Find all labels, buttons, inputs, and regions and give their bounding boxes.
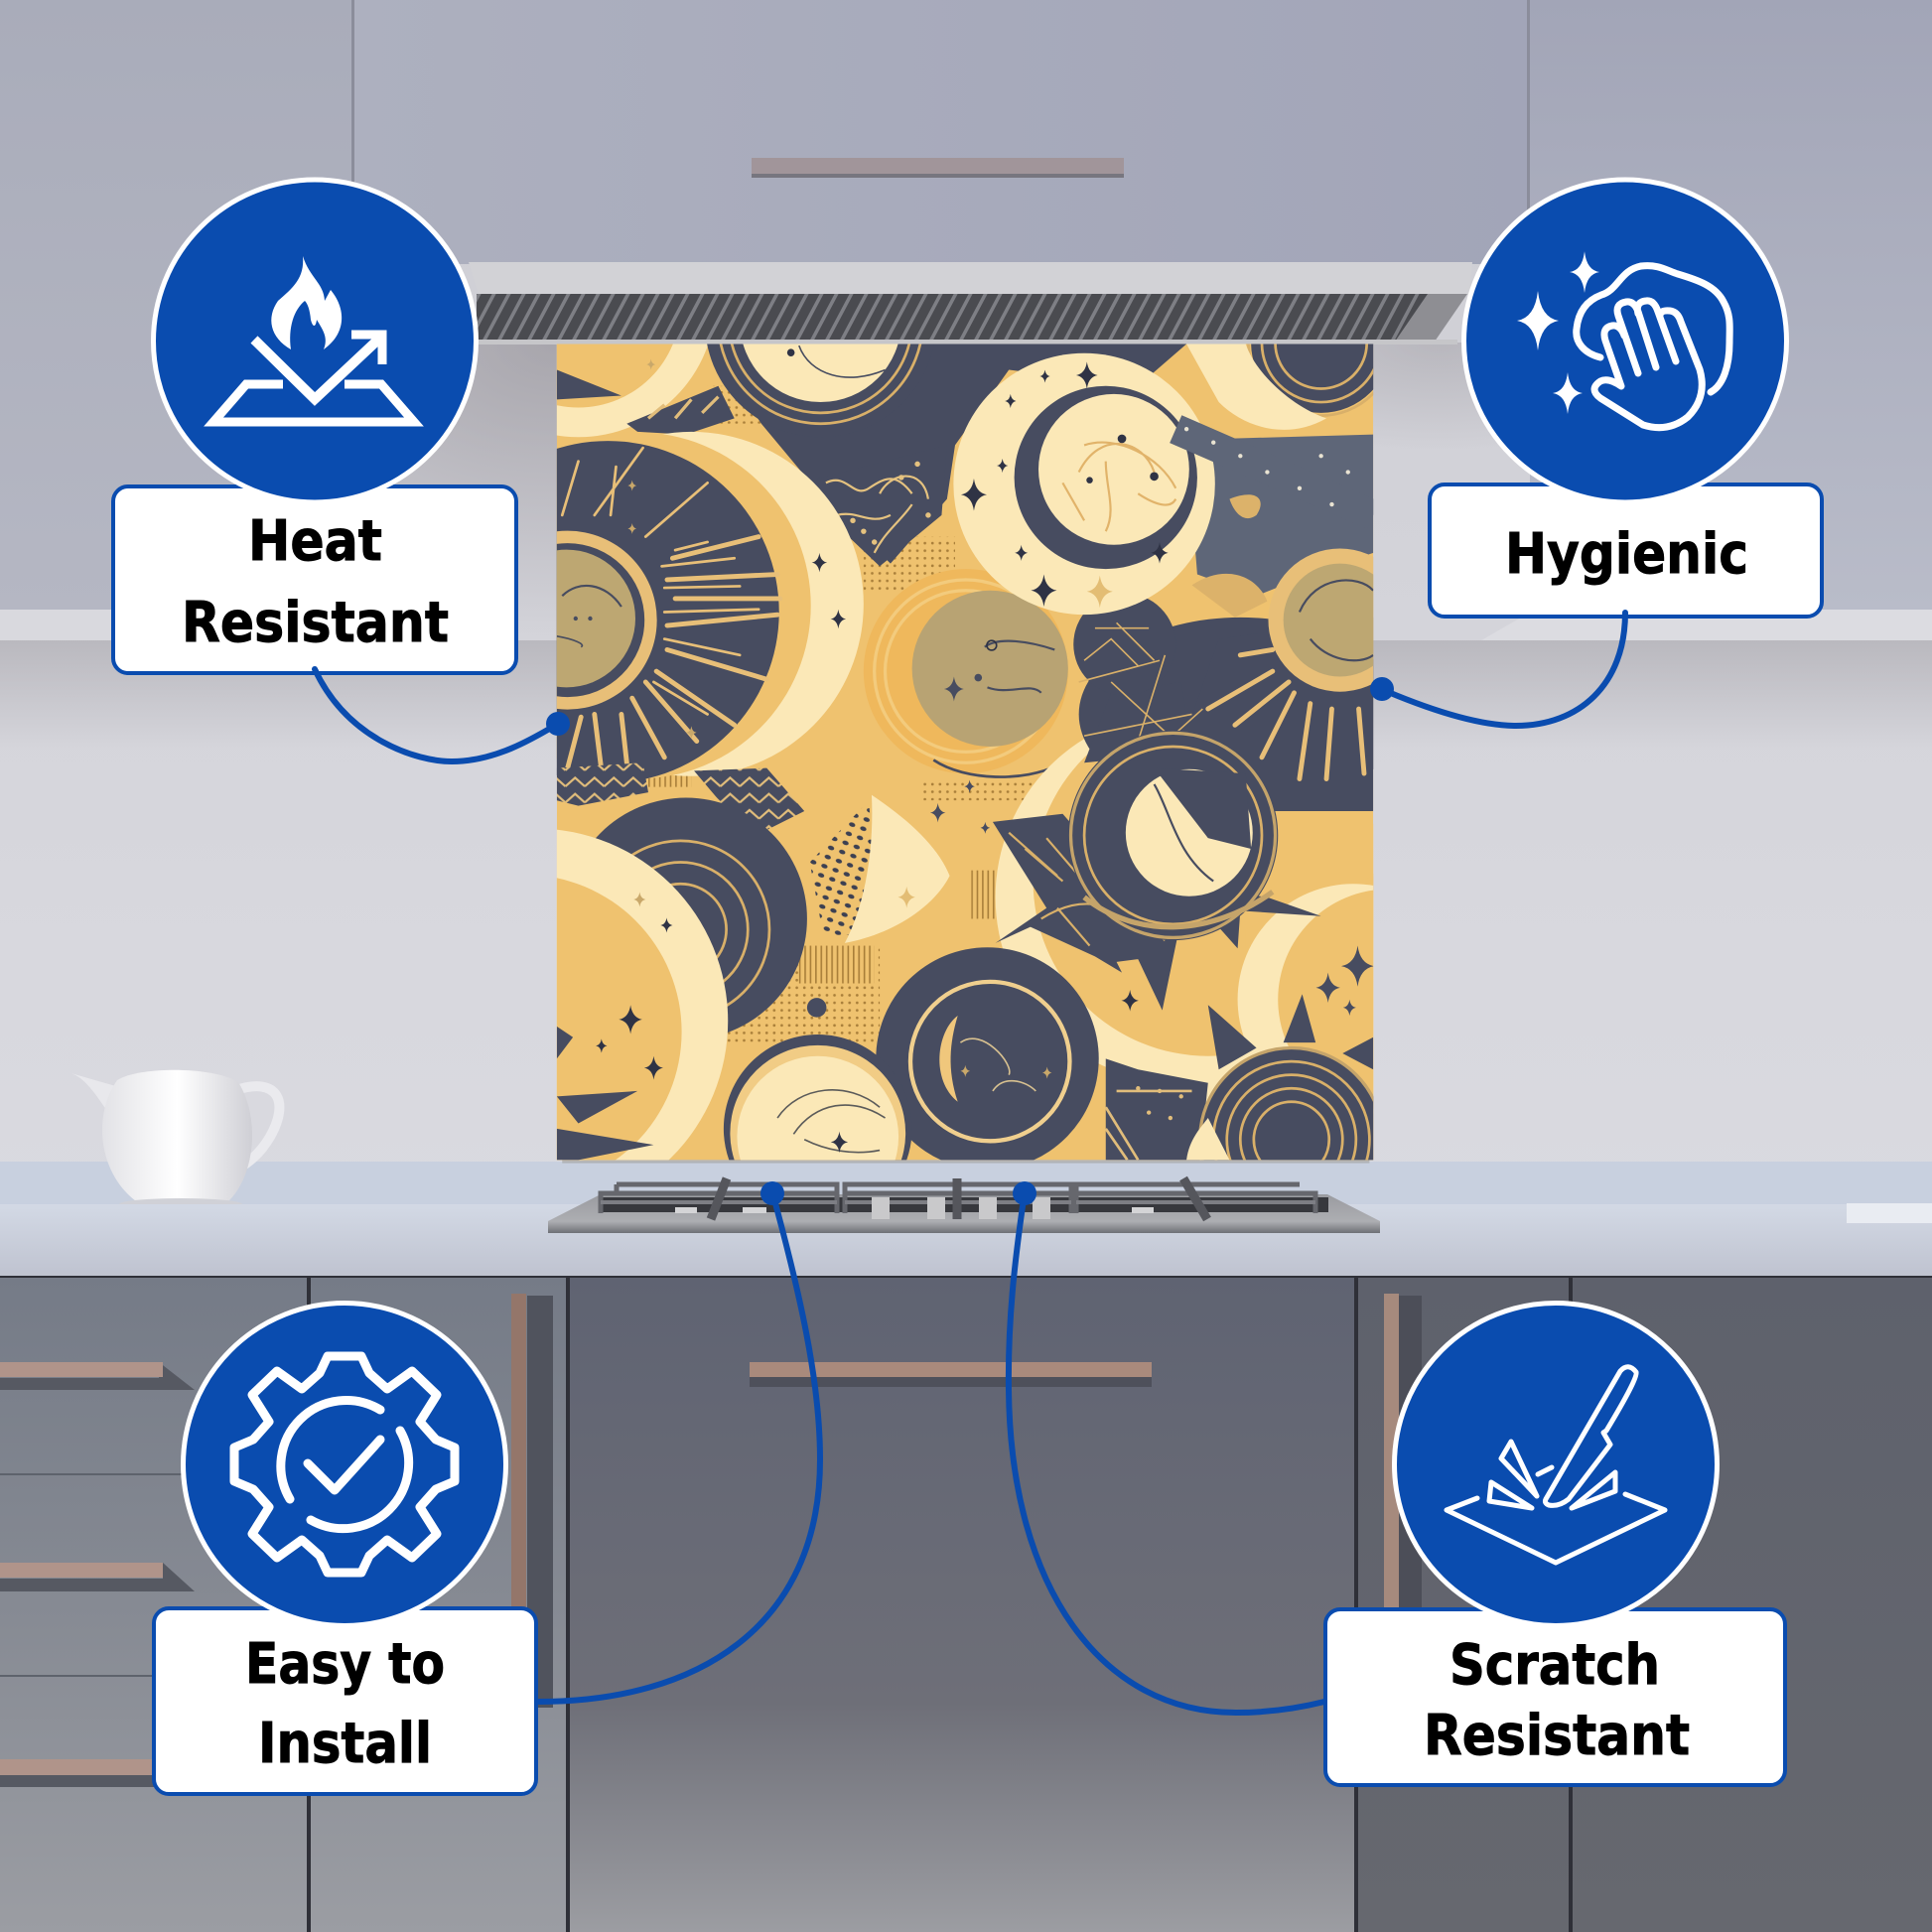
callout label: Hygienic [1430,484,1822,617]
cooktop [548,1178,1380,1233]
badge: hygienic [1463,180,1787,502]
sun rays [568,537,780,779]
icon: gear with check mark [234,1356,455,1573]
callout label: Scratch Resistant [1325,1609,1785,1785]
label text: Resistant: Resistant [1424,1704,1690,1768]
label text: Easy to: Easy to [245,1632,445,1697]
cream wedge [845,795,950,943]
large left crescent with sun [556,431,864,778]
bottom centre navy moon disc [876,947,1099,1171]
centre gold swirl sun [864,569,1068,834]
upper cabinets [0,0,1932,640]
teapot [68,1070,279,1210]
bottom-right pattern and spiral disc [1105,1046,1374,1160]
cooker hood [469,262,1472,345]
counter back strip [0,1162,1932,1206]
top-right corner crescent [1170,344,1374,515]
countertop [0,1203,1932,1276]
connector: Heat Resistant to panel [315,669,570,761]
icon: flame over surface with arrow [213,256,414,422]
navy starburst [993,814,1374,1069]
label text: Scratch: Scratch [1449,1633,1660,1698]
callout label: Easy to Install [154,1608,536,1794]
speckled wedge patch [810,800,874,935]
splashback panel artwork [556,344,1374,1164]
icon: hand wiping with sparkles [1517,251,1729,428]
label text: Install: Install [258,1712,432,1776]
navy blob top [758,344,1186,564]
top-left crescent [556,344,735,437]
top-right crescent moon [953,353,1215,615]
connector: Hygienic to panel [1370,613,1625,726]
connector: Easy to Install to cooktop [539,1181,820,1702]
bottom cream sun disc [723,998,911,1160]
badge: scratch resistant [1394,1303,1718,1626]
top centre disc [707,344,921,425]
badge: heat resistant [153,180,477,502]
label text: Heat: Heat [248,509,382,574]
connector: Scratch Resistant to cooktop [1009,1181,1324,1713]
bottom-left navy disc [596,798,807,1033]
patterned doodle patch [826,461,943,566]
bottom-left cream sun [556,830,729,1160]
icon: knife scratching surface [1447,1367,1665,1563]
callout label: Heat Resistant [113,486,516,673]
right ring medallion [1068,731,1278,940]
navy pattern strip under crescent [557,762,804,830]
label text: Hygienic: Hygienic [1505,522,1748,587]
badge: easy to install [183,1303,506,1626]
lower-right cream ring [995,739,1374,1160]
right navy blob and sun [1073,435,1374,811]
label text: Resistant: Resistant [182,591,449,655]
halftone texture on gold [643,386,1052,1042]
lower cabinets [0,1276,1932,1932]
